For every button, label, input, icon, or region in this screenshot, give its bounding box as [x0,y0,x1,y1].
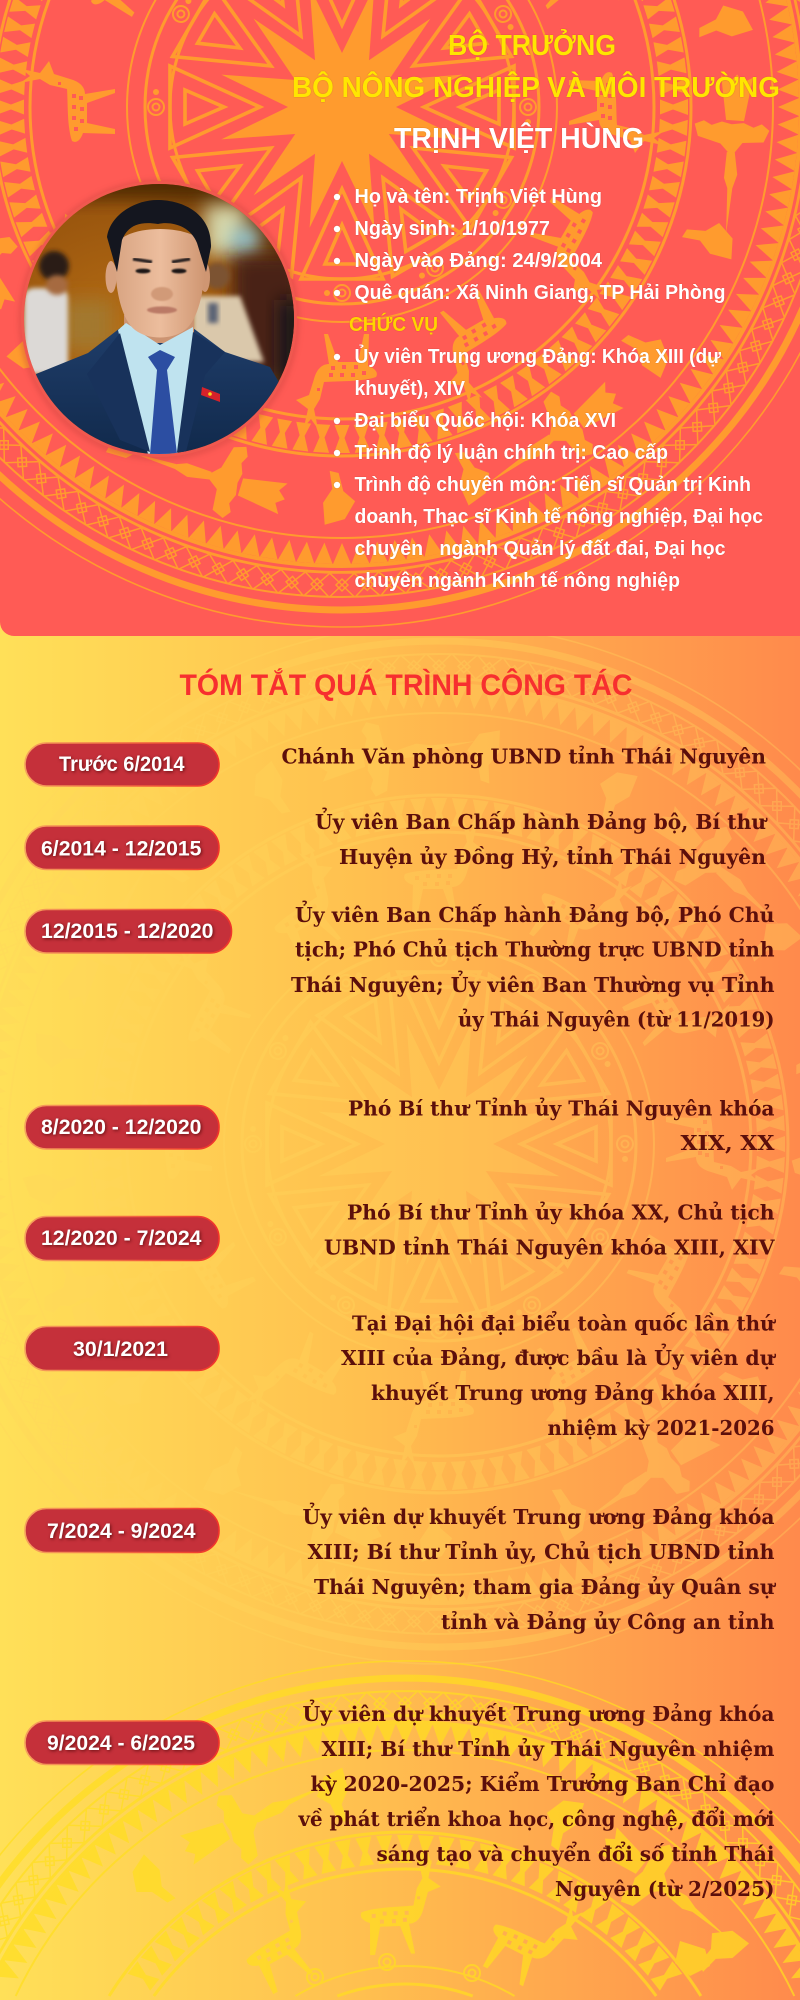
title: minister heading [292,28,780,155]
job description: Chánh Văn phòng UBND tỉnh Thái Nguyên [282,744,766,768]
timeline row 5 [25,1200,776,1260]
date pill: 30/1/2021 [73,1337,168,1361]
job description: khuyết Trung ương Đảng khóa XIII, [371,1381,774,1405]
text: central committee [334,344,721,400]
job description: Nguyên (từ 2/2025) [555,1877,774,1901]
date pill [25,743,219,786]
text: hometown: Quê quán: Xã Ninh Giang, TP Hải Phòng [354,282,726,304]
text: education: chuyên ngành Quản lý đất đai, Đại học [354,538,726,560]
job description: XIII; Bí thư Tỉnh ủy, Chủ tịch UBND tỉnh [308,1540,775,1564]
text: education [334,474,763,592]
bullet list: personal details [334,186,763,592]
timeline row 3 [25,899,775,1032]
title: minister heading: BỘ NÔNG NGHIỆP VÀ MÔI TRƯỜNG [292,70,780,104]
job description [348,1096,775,1155]
timeline row 6 [25,1310,777,1440]
date pill: 12/2015 - 12/2020 [41,919,214,943]
date pill [25,1106,219,1149]
job description: XIX, XX [680,1131,775,1155]
heading: positions: CHỨC VỤ [349,312,438,336]
text: political theory: Trình độ lý luận chính trị: Cao cấp [354,442,668,464]
date pill: 9/2024 - 6/2025 [47,1731,195,1755]
text: date of birth: Ngày sinh: 1/10/1977 [354,218,550,240]
date pill: Trước 6/2014 [59,752,185,776]
title: minister heading: TRỊNH VIỆT HÙNG [394,121,644,155]
job description: Thái Nguyên; Ủy viên Ban Thường vụ Tỉnh [291,969,775,997]
job description: tỉnh và Đảng ủy Công an tỉnh [441,1610,775,1634]
panel: upper red profile section background [0,0,800,636]
heading: career summary: TÓM TẮT QUÁ TRÌNH CÔNG TÁC [180,668,632,702]
panel: lower career section background [0,620,800,2000]
job description [302,1501,777,1634]
job description: nhiệm kỳ 2021-2026 [548,1416,774,1440]
job description: Phó Bí thư Tỉnh ủy khóa XX, Chủ tịch [347,1200,775,1224]
date pill [25,1326,219,1370]
date pill [25,910,232,953]
text: national assembly: Đại biểu Quốc hội: Khóa XVI [354,410,616,432]
job description [291,899,775,1032]
timeline row 8 [25,1698,775,1901]
date pill [25,1508,219,1552]
job description: kỳ 2020-2025; Kiểm Trưởng Ban Chỉ đạo [310,1771,774,1796]
job description: Ủy viên Ban Chấp hành Đảng bộ, Phó Chủ [295,899,775,927]
job description [315,806,768,869]
job description: ủy Thái Nguyên (từ 11/2019) [458,1008,774,1032]
timeline row 2 [25,806,768,870]
job description: sáng tạo và chuyển đổi số tỉnh Thái [376,1841,775,1866]
job description: Ủy viên Ban Chấp hành Đảng bộ, Bí thư [315,806,768,834]
job description: XIII; Bí thư Tỉnh ủy Thái Nguyên nhiệm [322,1737,775,1761]
job description: tịch; Phó Chủ tịch Thường trực UBND tỉnh [295,938,775,962]
job description [298,1698,775,1901]
job description [324,1200,776,1260]
timeline row 1 [25,743,766,786]
text: education: chuyên ngành Kinh tế nông nghiệp [354,570,680,592]
job description: Ủy viên dự khuyết Trung ương Đảng khóa [302,1698,774,1726]
text: education: doanh, Thạc sĩ Kinh tế nông nghiệp, Đại học [354,506,763,528]
job description: Ủy viên dự khuyết Trung ương Đảng khóa [302,1501,774,1529]
date pill: 6/2014 - 12/2015 [41,836,202,860]
job description [341,1310,777,1440]
date pill [25,1721,219,1764]
date pill: 7/2024 - 9/2024 [47,1519,196,1543]
text: central committee: khuyết), XIV [354,378,466,400]
text: full name: Họ và tên: Trịnh Việt Hùng [354,186,602,208]
portrait photo [18,170,304,470]
text: party join date: Ngày vào Đảng: 24/9/2004 [354,250,603,272]
date pill: 8/2020 - 12/2020 [41,1115,202,1139]
timeline row 4 [25,1096,775,1155]
title: minister heading: BỘ TRƯỞNG [448,28,616,62]
text: central committee: Ủy viên Trung ương Đảng: Khóa XIII (dự [354,344,721,368]
date pill [25,826,219,870]
job description: Huyện ủy Đồng Hỷ, tỉnh Thái Nguyên [339,845,766,869]
job description: Phó Bí thư Tỉnh ủy Thái Nguyên khóa [348,1096,774,1120]
date pill [25,1216,219,1260]
timeline row 7 [25,1501,777,1634]
text: education: Trình độ chuyên môn: Tiến sĩ Quản trị Kinh [354,474,751,496]
job description: XIII của Đảng, được bầu là Ủy viên dự [341,1342,777,1370]
job description: Tại Đại hội đại biểu toàn quốc lần thứ [352,1310,777,1336]
date pill: 12/2020 - 7/2024 [41,1226,202,1250]
job description: UBND tỉnh Thái Nguyên khóa XIII, XIV [324,1236,776,1260]
job description: Thái Nguyên; tham gia Đảng ủy Quân sự [314,1575,777,1599]
job description: về phát triển khoa học, công nghệ, đổi mới [298,1806,775,1831]
